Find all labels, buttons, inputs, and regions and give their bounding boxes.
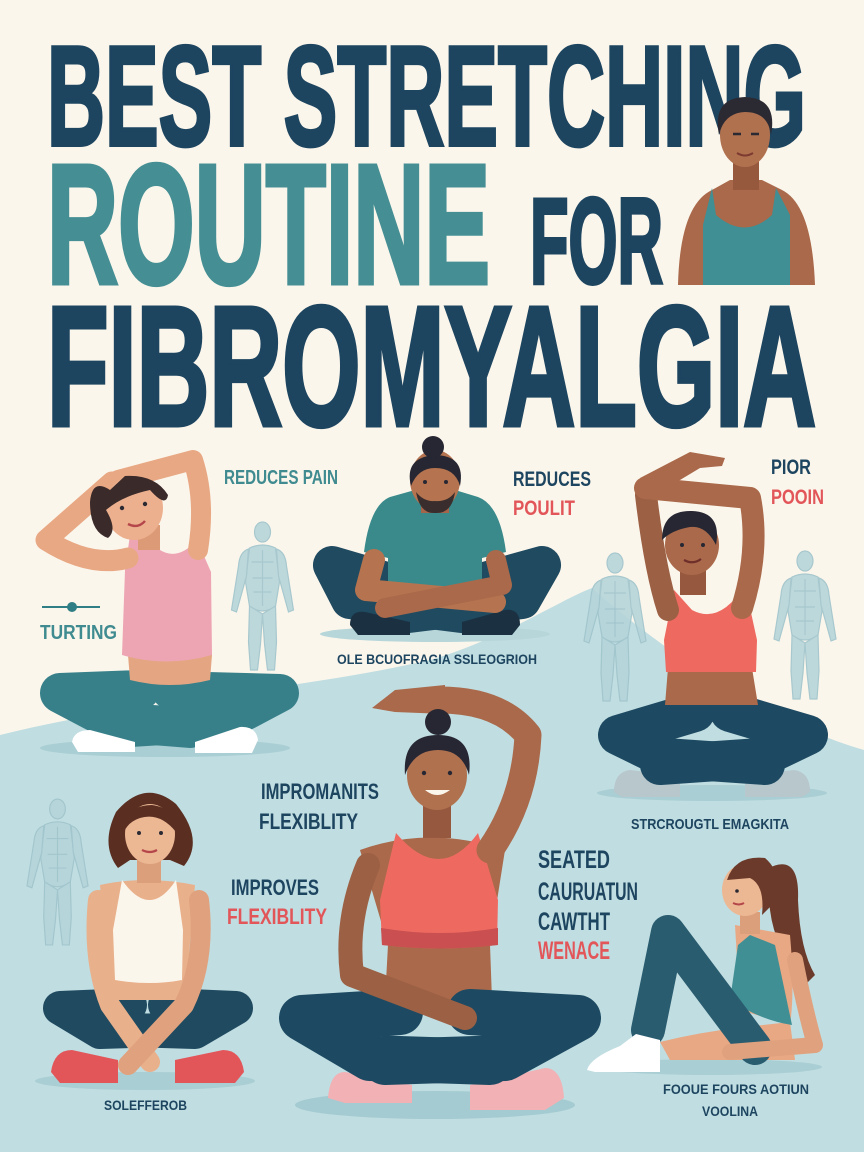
label: improves flexiblity: IMPROVES	[231, 875, 319, 900]
label: turting with icon	[40, 602, 117, 644]
head	[405, 709, 470, 838]
anatomy figure 3	[774, 551, 836, 699]
coral bra	[380, 833, 498, 948]
anatomy figure 4	[27, 799, 88, 945]
arms	[96, 900, 150, 1062]
caption: side-seated woman: VOOLINA	[702, 1103, 758, 1119]
caption: man: OLE BCUOFRAGIA SSLEOGRIOH	[337, 651, 537, 667]
shoe	[587, 1034, 660, 1072]
shirt	[364, 490, 506, 592]
bent leg	[648, 932, 755, 1048]
label: impromanits flexiblity	[259, 779, 379, 834]
label: impromanits flexiblity: IMPROMANITS	[261, 779, 379, 804]
legs	[60, 690, 280, 728]
head	[108, 793, 193, 883]
figure: seated woman in white top	[35, 793, 255, 1090]
figure: man in teal shirt	[320, 436, 550, 642]
label: improves flexiblity: FLEXIBLITY	[227, 904, 327, 929]
label: turting with icon: TURTING	[40, 622, 117, 644]
legs	[60, 1005, 165, 1032]
figure: central woman in coral bra	[295, 685, 578, 1119]
shoes	[350, 610, 520, 635]
figure: woman portrait in teal tank	[678, 97, 815, 285]
shoes	[328, 1068, 564, 1110]
label: pior poin: PIOR	[771, 456, 811, 479]
legs	[302, 1012, 490, 1062]
hip and lower leg	[660, 1022, 795, 1060]
white tank	[113, 880, 183, 983]
torso	[735, 925, 792, 1025]
arms	[46, 460, 201, 561]
label: seated caurautun: WENACE	[538, 937, 610, 965]
label: pior poin	[771, 456, 824, 509]
torso	[360, 838, 505, 1000]
raised arm	[440, 700, 528, 850]
caption: side-seated woman: FOOUE FOURS AOTIUN	[663, 1081, 809, 1097]
label: reduces poulit: POULIT	[513, 497, 575, 520]
title: FOR	[530, 173, 663, 309]
label: reduces poulit	[513, 468, 591, 520]
head	[722, 858, 777, 934]
label: reduces pain: REDUCES PAIN	[224, 467, 338, 489]
label: impromanits flexiblity: FLEXIBLITY	[259, 809, 358, 834]
figure: side-seated woman with ponytail	[587, 858, 822, 1075]
caption: side-seated woman	[663, 1081, 809, 1119]
arm	[730, 960, 815, 1052]
shoes	[72, 727, 258, 753]
label: seated caurautun	[538, 846, 638, 965]
caption: coral woman: STRCROUGTL EMAGKITA	[631, 816, 789, 833]
ponytail	[765, 864, 815, 985]
anatomy figure 2	[584, 553, 646, 701]
pink top	[122, 535, 212, 662]
label: seated caurautun: SEATED	[538, 846, 610, 874]
shoes	[614, 770, 810, 797]
crossed arms	[366, 560, 495, 602]
coral top	[664, 585, 757, 672]
label: seated caurautun: CAURUATUN	[538, 878, 638, 906]
caption: seated woman: SOLEFFEROB	[104, 1097, 187, 1113]
figure: woman in coral top, arms overhead	[597, 452, 827, 801]
shoes	[51, 1050, 244, 1083]
torso	[100, 880, 195, 1000]
figure: woman in pink top	[40, 460, 290, 757]
title	[47, 17, 816, 462]
teal tank	[730, 935, 792, 1025]
head	[662, 511, 719, 595]
legs	[618, 712, 765, 765]
arms	[646, 495, 668, 610]
title: ROUTINE	[47, 130, 490, 320]
head	[410, 436, 461, 513]
label: pior poin: POOIN	[771, 486, 824, 509]
anatomy figure 1	[232, 522, 294, 670]
lowered arm	[350, 865, 465, 1018]
label: seated caurautun: CAWTHT	[538, 908, 610, 936]
label: reduces poulit: REDUCES	[513, 468, 591, 491]
light blue hill	[0, 588, 864, 1152]
head	[90, 476, 168, 540]
legs	[332, 565, 470, 615]
label: improves flexiblity	[227, 875, 327, 929]
